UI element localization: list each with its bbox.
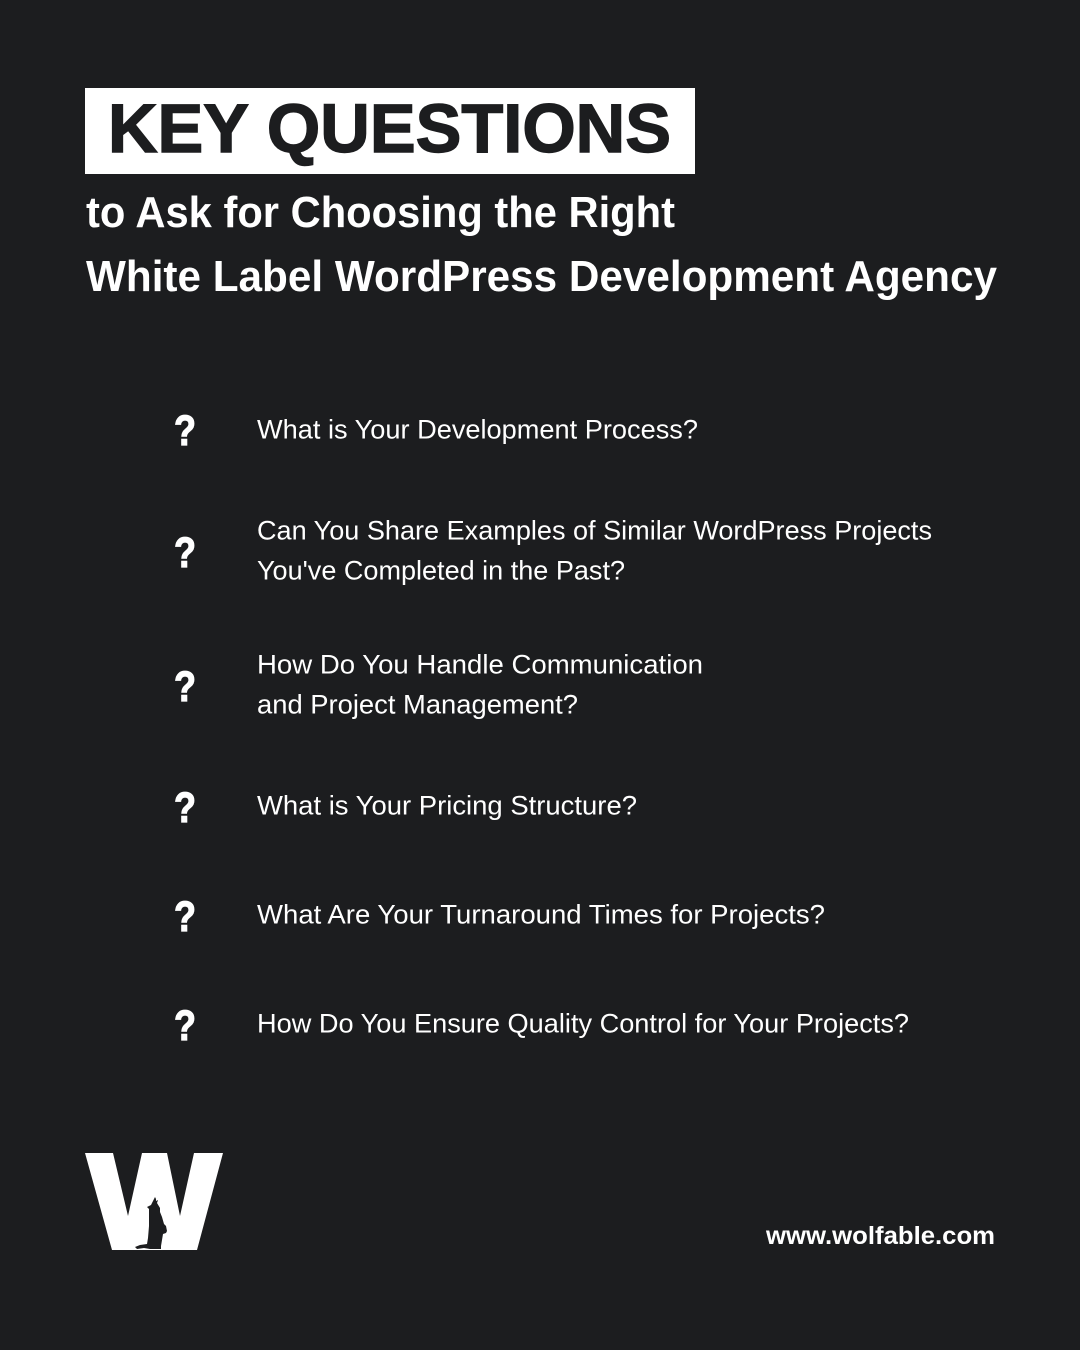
question 6: ? (174, 1002, 196, 1050)
question 5: ? (174, 893, 196, 941)
icon: wolfable W logo with howling wolf (85, 1153, 223, 1250)
subtitle: White Label WordPress Development Agency (86, 252, 998, 301)
question 3 (174, 650, 703, 720)
question 1: ? (174, 407, 196, 455)
question 4: ? (174, 784, 196, 832)
question 2: You've Completed in the Past? (257, 556, 625, 586)
question 2: Can You Share Examples of Similar WordPress Projects (257, 516, 932, 546)
title: key questions: KEY QUESTIONS (108, 90, 671, 167)
question 4 (174, 784, 637, 832)
question 3: ? (174, 663, 196, 711)
question 4: What is Your Pricing Structure? (257, 790, 637, 820)
subtitle (86, 188, 998, 301)
question 5 (174, 893, 825, 941)
subtitle: to Ask for Choosing the Right (86, 188, 675, 237)
question 5: What Are Your Turnaround Times for Projects? (257, 900, 825, 930)
question 3: and Project Management? (257, 690, 578, 720)
question 1: What is Your Development Process? (257, 414, 698, 444)
question 2 (174, 516, 932, 586)
website url: www.wolfable.com (765, 1222, 995, 1250)
question 3: How Do You Handle Communication (257, 650, 703, 680)
question 1 (174, 407, 698, 455)
question 2: ? (174, 529, 196, 577)
question 6 (174, 1002, 909, 1050)
question 6: How Do You Ensure Quality Control for Your Projects? (257, 1008, 909, 1038)
